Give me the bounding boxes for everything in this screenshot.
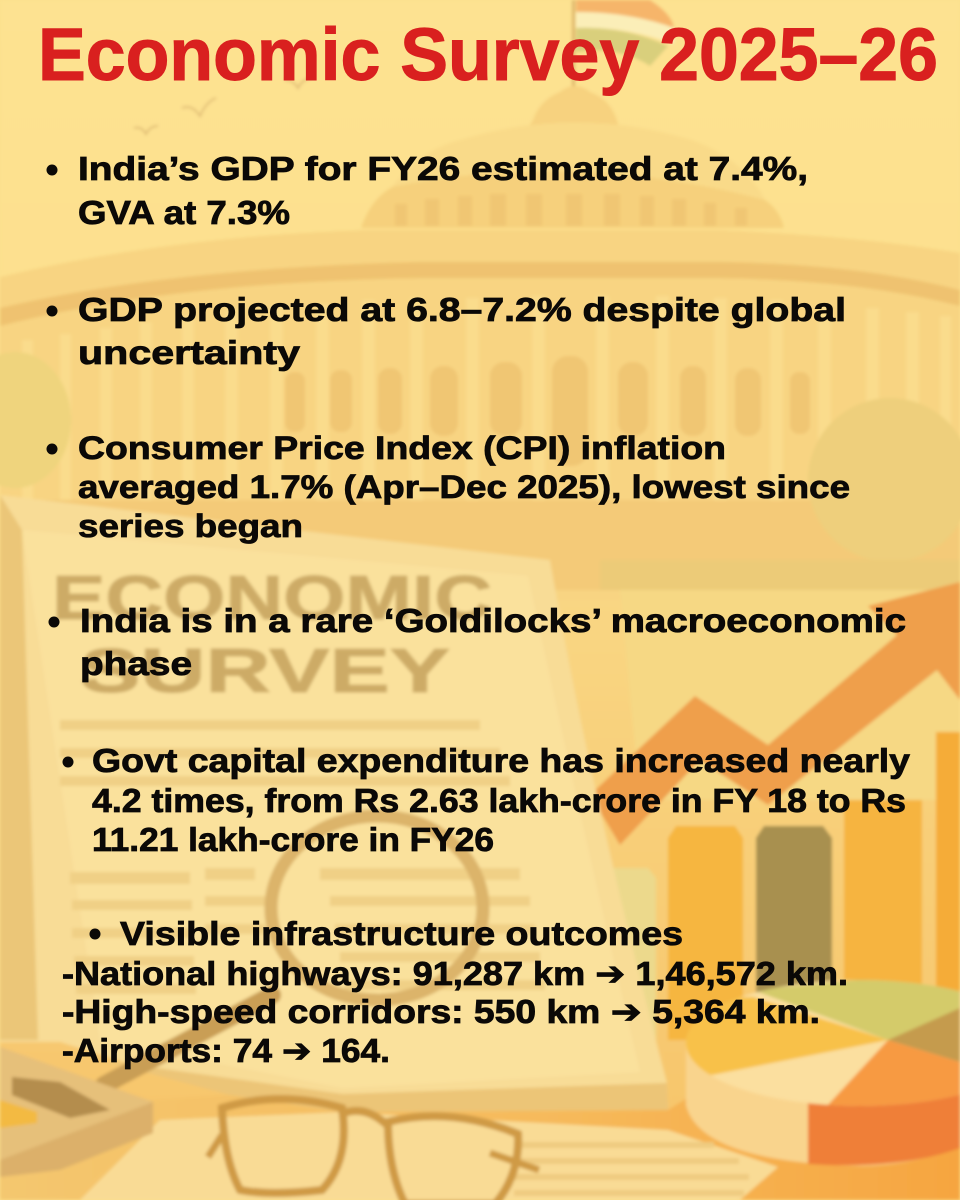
bullet: Goldilocks phase: phase <box>80 645 192 682</box>
bullet: GDP estimate: India’s GDP for FY26 estimated at 7.4%, <box>78 150 808 187</box>
bullet: infrastructure outcomes <box>62 915 848 1069</box>
document heading <box>52 564 492 706</box>
document heading: SURVEY <box>80 637 450 706</box>
bullet: infrastructure outcomes: Visible infrastructure outcomes <box>120 915 683 952</box>
bullet: capital expenditure: 4.2 times, from Rs 2.63 lakh-crore in FY 18 to Rs <box>92 782 906 819</box>
bullet: infrastructure outcomes: -National highways: 91,287 km ➔ 1,46,572 km. <box>62 955 848 992</box>
bullet: Goldilocks phase <box>48 602 906 682</box>
bullet: CPI inflation: averaged 1.7% (Apr–Dec 2025), lowest since <box>78 469 850 505</box>
newspaper <box>80 1112 778 1200</box>
title: Economic Survey 2025–26 <box>38 13 938 96</box>
document heading: ECONOMIC <box>52 564 492 633</box>
bullet: infrastructure outcomes: -High-speed corridors: 550 km ➔ 5,364 km. <box>62 993 820 1030</box>
bullet: GDP projection <box>46 291 846 371</box>
bullet: capital expenditure: 11.21 lakh-crore in FY26 <box>92 821 494 858</box>
document: economic survey report <box>0 495 668 1112</box>
icon: rising arrow <box>590 582 960 845</box>
icon: calculator <box>0 1047 153 1177</box>
bullet: GDP projection: uncertainty <box>78 334 301 371</box>
bullet: GDP projection: GDP projected at 6.8–7.2% despite global <box>78 291 846 328</box>
bullet: GDP estimate <box>46 150 808 231</box>
icon: magnifying glass <box>104 816 483 1085</box>
icon: pie chart <box>680 970 960 1166</box>
bullet: CPI inflation: series began <box>78 508 303 544</box>
bullet: infrastructure outcomes: -Airports: 74 ➔ 164. <box>62 1032 390 1069</box>
parliament building <box>0 86 960 600</box>
trees and lawn <box>0 352 960 800</box>
bullet: CPI inflation: Consumer Price Index (CPI) inflation <box>78 430 726 466</box>
icon: flag <box>572 0 674 90</box>
desk surface <box>0 1090 960 1200</box>
bullet: capital expenditure <box>62 742 911 858</box>
icon: birds <box>134 78 310 134</box>
bullet: capital expenditure: Govt capital expenditure has increased nearly <box>92 742 911 779</box>
document text rows <box>60 720 545 994</box>
bullet: Goldilocks phase: India is in a rare ‘Goldilocks’ macroeconomic <box>80 602 906 639</box>
bullet: GDP estimate: GVA at 7.3% <box>78 194 290 231</box>
bar chart <box>600 732 960 1040</box>
icon: glasses <box>208 1099 539 1200</box>
bullet: CPI inflation <box>46 430 850 544</box>
